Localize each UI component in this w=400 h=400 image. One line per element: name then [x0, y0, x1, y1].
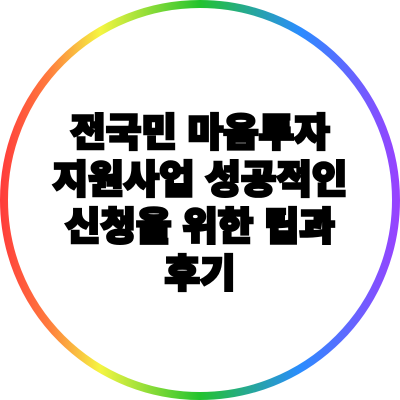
title [52, 112, 347, 296]
title: 후기 [164, 253, 235, 296]
title: 신청을 위한 팁과 [65, 206, 335, 249]
title: 지원사업 성공적인 [53, 159, 347, 202]
title: 전국민 마음투자 [70, 112, 330, 155]
